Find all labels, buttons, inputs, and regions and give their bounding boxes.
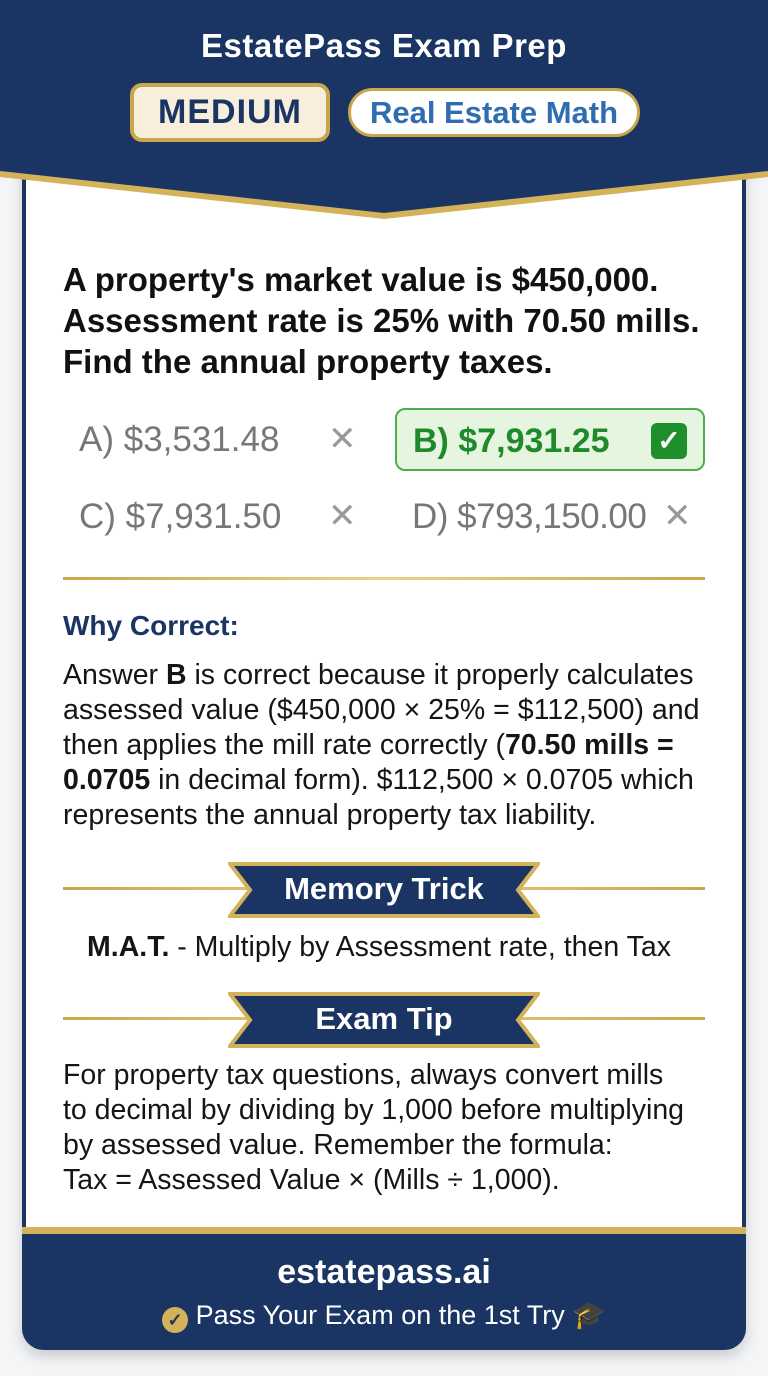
footer brand: estatepass.ai: [277, 1253, 491, 1291]
question: Find the annual property taxes.: [63, 343, 553, 380]
banner: exam tip: [63, 992, 705, 1048]
question: [63, 261, 700, 380]
option B correct: [395, 408, 705, 471]
title: EstatePass Exam Prep: [201, 27, 567, 64]
banner: memory trick: [63, 862, 705, 918]
question: A property's market value is $450,000.: [63, 261, 658, 298]
explanation: represents the annual property tax liability.: [63, 799, 596, 831]
options: [79, 408, 705, 536]
exam tip text: [63, 1059, 684, 1196]
badge: medium: MEDIUM: [158, 93, 302, 131]
footer tagline: ✓: [168, 1310, 183, 1330]
exam tip text: by assessed value. Remember the formula:: [63, 1129, 613, 1161]
explanation: Answer B is correct because it properly calculates: [63, 659, 693, 691]
exam tip text: For property tax questions, always convert mills: [63, 1059, 663, 1091]
memory trick text: M.A.T. - Multiply by Assessment rate, then Tax: [87, 931, 671, 963]
explanation: assessed value ($450,000 × 25% = $112,500) and: [63, 694, 699, 726]
header: [0, 0, 768, 219]
question: Assessment rate is 25% with 70.50 mills.: [63, 302, 700, 339]
options: ✕: [328, 497, 356, 535]
footer: [22, 1227, 746, 1350]
badge: medium: [130, 83, 330, 142]
why correct heading: Why Correct:: [63, 610, 239, 641]
banner: memory trick: Memory Trick: [284, 871, 484, 906]
option B correct: ✓: [657, 425, 681, 456]
explanation: [63, 659, 699, 831]
options: ✕: [328, 420, 356, 458]
exam tip text: Tax = Assessed Value × (Mills ÷ 1,000).: [63, 1164, 560, 1196]
exam tip text: to decimal by dividing by 1,000 before multiplying: [63, 1094, 684, 1126]
banner: exam tip: Exam Tip: [315, 1001, 453, 1036]
option A: A) $3,531.48: [79, 420, 279, 459]
option D: D) $793,150.00: [412, 497, 646, 536]
footer tagline: Pass Your Exam on the 1st Try 🎓: [196, 1300, 606, 1330]
badge: category: [348, 88, 640, 137]
options: ✕: [663, 497, 692, 535]
option C: C) $7,931.50: [79, 497, 281, 536]
explanation: 0.0705 in decimal form). $112,500 × 0.0705 which: [63, 764, 694, 796]
option B correct: B) $7,931.25: [413, 422, 610, 460]
explanation: then applies the mill rate correctly (70.50 mills =: [63, 729, 674, 761]
badge: category: Real Estate Math: [370, 95, 618, 130]
